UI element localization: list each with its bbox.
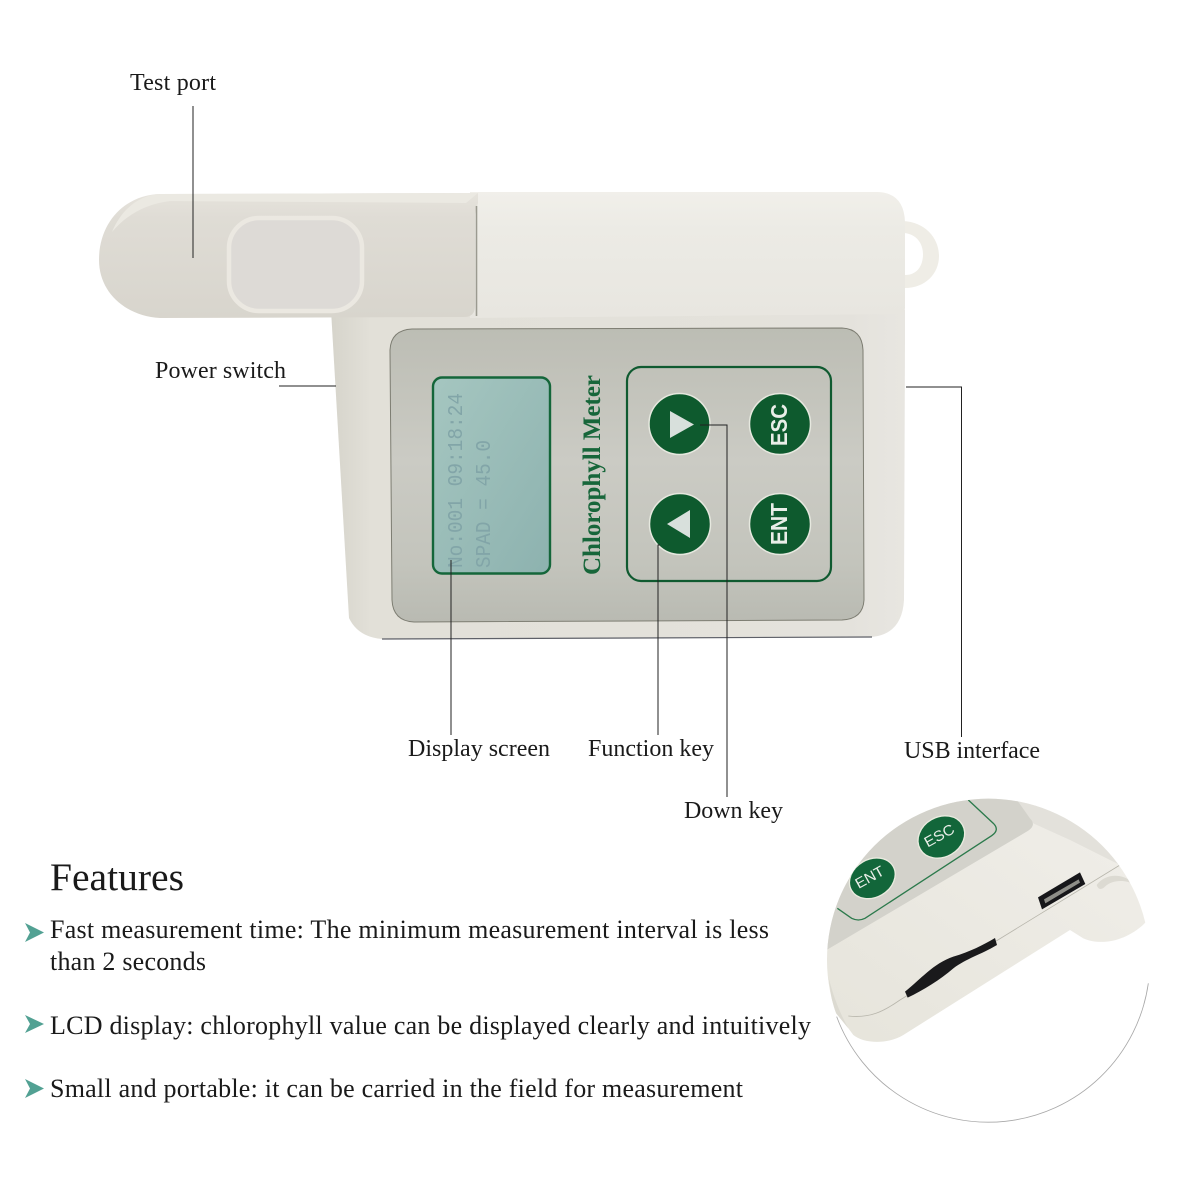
button: ESC: [750, 394, 810, 454]
button: right arrow: [649, 394, 710, 454]
device top bar: [470, 192, 905, 318]
lcd reading line 2: SPAD = 45.0: [474, 440, 497, 568]
device: chlorophyll meter: [99, 192, 939, 639]
product name: Chlorophyll Meter: [579, 375, 606, 575]
inset lanyard loop: [1096, 876, 1130, 889]
inset button ENT: ENT: [853, 864, 887, 892]
feature: LCD display: LCD display: chlorophyll value can be displayed clearly and intuitively: [50, 1011, 811, 1040]
lcd reading line 1: No:001 09:18:24: [446, 393, 469, 568]
feature: small and portable: Small and portable: it can be carried in the field for measurement: [50, 1074, 744, 1103]
icon: lanyard loop: [903, 221, 939, 288]
inset button ESC: [917, 815, 966, 859]
slider top highlight: [112, 193, 478, 232]
device bottom edge: [382, 637, 872, 639]
callout: USB interface: USB interface: [904, 738, 1040, 764]
inset button ESC: ESC: [922, 821, 958, 851]
inset keypad frame: [837, 800, 996, 920]
inset upper-right face shading: [1018, 802, 1118, 864]
button: ESC: ESC: [766, 404, 792, 446]
inset photo: side ports close-up: [820, 790, 1153, 1122]
feature: fast measurement: [25, 915, 769, 976]
device lower body: [331, 310, 905, 639]
inset USB port: [1038, 872, 1085, 909]
inset seam line: [848, 865, 1120, 1016]
callout: down key: Down key: [684, 798, 783, 824]
control panel: [390, 328, 864, 622]
callout: USB interface: [904, 387, 1040, 764]
inset circle outline: [837, 983, 1148, 1122]
callout: test port: Test port: [130, 70, 216, 96]
callout: down key: [684, 425, 783, 824]
feature list: [25, 915, 811, 1103]
button: ENT: ENT: [766, 503, 792, 545]
test port slider: [99, 193, 478, 318]
feature: fast measurement: Fast measurement time: The minimum measurement interval is less: [50, 915, 769, 944]
inset side shading: [829, 980, 848, 1028]
callout: power switch: Power switch: [155, 358, 286, 384]
callout: function key: Function key: [588, 736, 714, 762]
inset button ENT: [848, 857, 896, 900]
callout: display screen: Display screen: [408, 736, 550, 762]
button: left arrow: [650, 494, 710, 554]
feature: fast measurement: than 2 seconds: [50, 947, 206, 976]
lcd display: [433, 378, 550, 574]
features heading: Features: [50, 855, 184, 899]
inset card slot: [905, 938, 997, 998]
inset panel: [820, 790, 1033, 950]
slider window: [229, 218, 362, 311]
keypad frame: [627, 367, 831, 581]
inset device body: [827, 822, 1146, 1042]
slider gap: [476, 206, 478, 316]
button: ENT: [750, 494, 810, 554]
